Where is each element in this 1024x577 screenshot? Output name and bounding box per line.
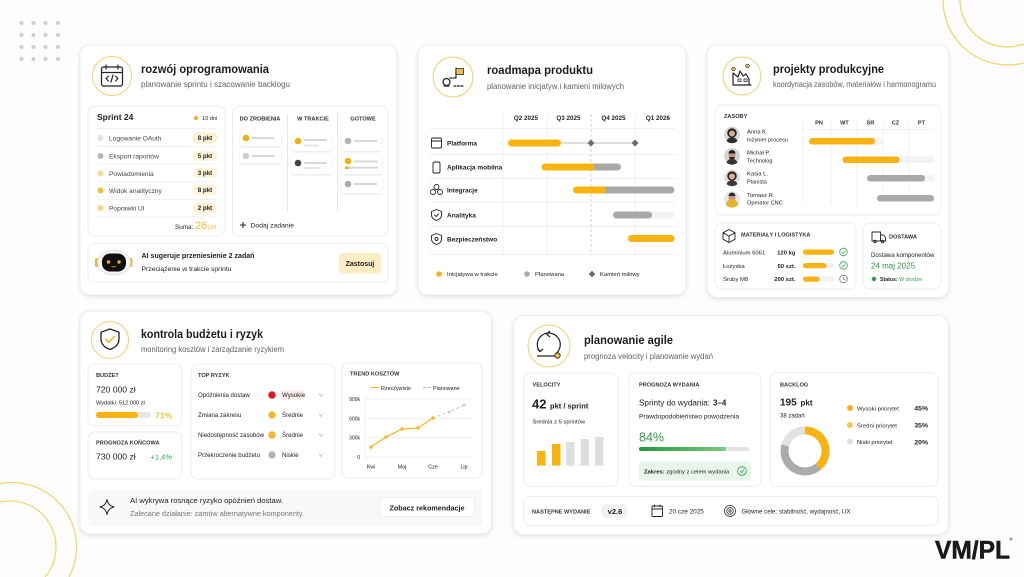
card: prognoza wydania: 3–4 <box>713 398 727 408</box>
legend: Planowana <box>535 272 565 278</box>
icon: roadmap flag <box>433 57 473 97</box>
gantt chart: Q1 2026 <box>646 115 671 122</box>
legend: Inicjatywa w trakcie <box>447 272 498 278</box>
legend <box>436 271 640 278</box>
row labels: Integracje <box>447 188 478 194</box>
card: sprint 24: pkt <box>208 224 217 231</box>
row labels: Platforma <box>447 140 477 148</box>
card: sprint 24: Sprint 24 <box>97 112 134 122</box>
gantt chart: Q2 2025 <box>514 115 539 122</box>
card: zasoby: ZASOBY <box>724 114 748 120</box>
subheading: monitoring kosztów i zarządzanie ryzykiem <box>141 344 284 354</box>
card: sprint 24: Eksport raportów <box>109 154 159 160</box>
card: dostawa: Dostawa komponentów <box>871 252 935 259</box>
legend <box>847 405 928 446</box>
heading: rozwój oprogramowania <box>141 62 269 76</box>
row labels: Analityka <box>447 212 476 220</box>
callout: AI risk: Zobacz rekomendacje <box>389 504 465 512</box>
card: sprint 24: Suma: <box>175 224 193 231</box>
resource names <box>747 130 788 206</box>
card: backlog: 195 <box>780 398 797 408</box>
background decoration: arcs bottom left <box>0 482 77 577</box>
heading: projekty produkcyjne <box>773 62 884 76</box>
callout: AI suggestion <box>88 244 388 282</box>
bar: następne wydanie: NASTĘPNE WYDANIE <box>532 510 591 516</box>
icon: target <box>724 506 736 516</box>
card: budżet: 720 000 zł <box>96 384 136 394</box>
panel: projekty produkcyjne <box>707 45 949 298</box>
resource names: Inżynier procesu <box>747 138 788 144</box>
resource bars <box>809 138 934 202</box>
card: velocity: 42 <box>532 396 546 412</box>
card: velocity: VELOCITY <box>532 382 561 388</box>
icon: factory <box>723 57 761 95</box>
row labels: Bezpieczeństwo <box>447 236 497 244</box>
card: trend kosztów line chart: Maj <box>398 464 406 470</box>
card: trend kosztów line chart <box>342 363 482 478</box>
legend: Wysoki priorytet <box>857 406 899 412</box>
card: trend kosztów line chart: 900k <box>349 397 360 403</box>
bars <box>508 140 674 242</box>
card: trend kosztów line chart: 600k <box>349 416 360 422</box>
subheading: koordynacja zasobów, materiałów i harmonogramu <box>773 79 936 89</box>
background decoration: arcs top right <box>943 0 1024 65</box>
resource names: Technolog <box>747 158 773 164</box>
card: materialy i logistyka <box>715 223 856 289</box>
callout: AI suggestion: Przeciążenie w trakcie sprintu <box>142 266 232 273</box>
card: backlog <box>770 372 938 486</box>
card: top ryzyk: Niskie <box>282 452 299 459</box>
bar: następne wydanie: v2.6 <box>608 507 622 516</box>
card: prognoza końcowa: +1,4% <box>151 452 172 462</box>
card: dostawa <box>863 223 941 289</box>
card: trend kosztów line chart: TREND KOSZTÓW <box>350 370 400 378</box>
card: materialy i logistyka: MATERIAŁY I LOGISTYKA <box>741 232 810 238</box>
bar chart <box>533 437 606 466</box>
card: dostawa: W drodze <box>899 277 922 283</box>
subheading: planowanie inicjatyw i kamieni milowych <box>487 81 624 91</box>
card: budżet: 71% <box>155 410 172 420</box>
card: prognoza wydania <box>629 373 761 486</box>
bar: następne wydanie: Główne cele: stabilność, wydajność, UX <box>742 510 850 516</box>
card: top ryzyk: TOP RYZYK <box>198 373 230 379</box>
card: materialy i logistyka: Śruby M8 <box>723 275 749 283</box>
icon: robot <box>95 250 132 275</box>
card: trend kosztów line chart: 300k <box>349 436 360 442</box>
card: sprint 24: 5 pkt <box>198 153 212 160</box>
callout: AI risk <box>88 490 482 526</box>
card: backlog: BACKLOG <box>780 382 808 388</box>
card: top ryzyk: Zmiana zakresu <box>198 412 241 419</box>
resource names: Anna K. <box>747 130 768 136</box>
icon: calendar <box>652 505 662 516</box>
card: materialy i logistyka: 50 szt. <box>777 264 796 270</box>
card: zasoby: PN <box>815 120 823 126</box>
legend: 35% <box>914 422 928 430</box>
panel: planowanie agile <box>514 316 948 534</box>
card: materialy i logistyka: 200 szt. <box>774 277 796 283</box>
card: prognoza wydania: Sprinty do wydania: <box>639 398 710 408</box>
resource names: Kasia L. <box>747 172 768 178</box>
card: sprint 24: 8 pkt <box>198 135 212 142</box>
card: top ryzyk: Opóźnienia dostaw <box>198 392 250 399</box>
logo: VM.PL: VM/PL <box>935 536 1010 564</box>
card: kanban <box>232 106 388 236</box>
card: sprint 24: 8 pkt <box>198 187 212 194</box>
card: trend kosztów line chart: Cze <box>428 464 438 470</box>
card: top ryzyk: Niedostępność zasobów <box>198 432 265 439</box>
resource names: Operator CNC <box>747 200 783 206</box>
heading: roadmapa produktu <box>487 63 593 77</box>
card: prognoza wydania: PROGNOZA WYDANIA <box>639 382 699 388</box>
subheading: planowanie sprintu i szacowanie backlogu <box>141 79 290 89</box>
card: top ryzyk: Średnie <box>282 411 304 419</box>
card: prognoza wydania: Prawdopodobieństwo powodzenia <box>639 414 739 420</box>
resource names: Tomasz R. <box>747 193 775 199</box>
card: kanban: DO ZROBIENIA <box>240 116 280 122</box>
card: top ryzyk: Przekroczenie budżetu <box>198 452 260 459</box>
icon: box <box>723 230 735 242</box>
card: prognoza końcowa: 730 000 zł <box>96 452 136 462</box>
card: kanban: W TRAKCIE <box>297 116 329 122</box>
icon: agile cycle <box>528 325 570 367</box>
bar: następne wydanie: 20 cze 2025 <box>669 508 704 516</box>
subheading: prognoza velocity i planowanie wydań <box>584 351 713 361</box>
heading: kontrola budżetu i ryzyk <box>141 327 263 341</box>
card: sprint 24: Poprawki UI <box>109 206 145 212</box>
card: top ryzyk: Średnie <box>282 431 304 439</box>
card: sprint 24 <box>88 106 225 236</box>
card: trend kosztów line chart: Planowane <box>433 386 460 392</box>
card: kanban: Dodaj zadanie <box>250 222 294 230</box>
card: budżet: BUDŻET <box>96 372 119 379</box>
card: velocity <box>524 373 618 486</box>
card: sprint 24: Widok analityczny <box>109 188 162 195</box>
panel: kontrola budżetu i ryzyk <box>80 311 492 534</box>
card: trend kosztów line chart: Kwi <box>367 464 375 470</box>
card: prognoza wydania: 84% <box>639 430 664 444</box>
card: zasoby: PT <box>918 120 926 126</box>
background decoration: dot grid <box>20 21 60 61</box>
callout: AI risk: Zalecane działanie: zamów alternatywne komponenty. <box>130 511 304 518</box>
card: budżet: Wydatki: 512 000 zł <box>96 400 146 406</box>
card: sprint 24: Logowanie OAuth <box>109 136 162 142</box>
card: sprint 24: 2 pkt <box>198 205 212 212</box>
card: sprint 24: Powiadomienia <box>109 171 154 178</box>
card: sprint 24: 26 <box>195 220 207 232</box>
resource names: Planista <box>747 180 768 186</box>
gantt chart: Q4 2025 <box>601 115 626 122</box>
card: prognoza końcowa: PROGNOZA KOŃCOWA <box>96 438 160 446</box>
card: zasoby <box>715 105 941 215</box>
card: zasoby: CZ <box>892 120 900 126</box>
callout: AI suggestion: Zastosuj <box>346 261 374 268</box>
card: velocity: pkt / sprint <box>550 402 589 410</box>
row icons <box>430 138 442 244</box>
card: materialy i logistyka: 120 kg <box>777 250 796 256</box>
card: sprint 24: 10 dni <box>202 116 217 122</box>
callout: AI risk: AI wykrywa rosnące ryzyko opóźnień dostaw. <box>130 496 283 505</box>
bar: następne wydanie <box>524 496 938 526</box>
card: prognoza końcowa <box>88 432 182 479</box>
legend: Średni priorytet <box>857 421 897 429</box>
card: trend kosztów line chart: 0 <box>357 455 360 461</box>
legend: 20% <box>914 439 928 446</box>
legend: Niski priorytet <box>857 440 893 446</box>
card: dostawa: Status: <box>880 277 898 283</box>
card: sprint 24: 3 pkt <box>198 170 212 177</box>
icon: calendar code <box>92 56 132 96</box>
heading: planowanie agile <box>584 333 673 347</box>
callout: AI suggestion: AI sugeruje przeniesienie 2 zadań <box>142 251 255 260</box>
panel: roadmapa produktu <box>418 45 686 295</box>
icon: sparkle <box>100 500 114 514</box>
card: velocity: Średnia z 5 sprintów <box>532 418 586 426</box>
card: trend kosztów line chart: Lip <box>460 464 468 470</box>
card: dostawa: DOSTAWA <box>889 234 917 240</box>
card: zasoby: ŚR <box>867 120 874 126</box>
row labels <box>447 140 503 244</box>
card: trend kosztów line chart: Rzeczywiste <box>381 386 411 392</box>
resource names: Michał P. <box>747 150 770 156</box>
legend: 45% <box>914 406 928 412</box>
card: prognoza wydania: Zakres: zgodny z celem wydania <box>644 470 730 476</box>
donut chart <box>784 430 826 472</box>
card: materialy i logistyka: Łożyska <box>723 264 745 270</box>
card: backlog: 38 zadań <box>780 414 805 420</box>
avatars <box>724 126 740 208</box>
card: budżet <box>88 364 182 426</box>
gantt chart <box>429 114 676 278</box>
card: top ryzyk <box>191 364 335 479</box>
card: backlog: pkt <box>800 398 813 408</box>
legend: Kamień milowy <box>600 272 640 278</box>
card: materialy i logistyka: Aluminium 6061 <box>723 250 765 256</box>
panel: rozwój oprogramowania <box>80 45 397 295</box>
card: kanban: GOTOWE <box>350 116 376 122</box>
icon: shield <box>92 322 128 358</box>
icon: truck <box>872 232 886 243</box>
card: zasoby: WT <box>840 120 849 126</box>
card: dostawa: 24 maj 2025 <box>871 262 916 270</box>
gantt chart: Q3 2025 <box>556 115 581 122</box>
card: top ryzyk: Wysokie <box>282 392 306 399</box>
row labels: Aplikacja mobilna <box>447 164 503 172</box>
